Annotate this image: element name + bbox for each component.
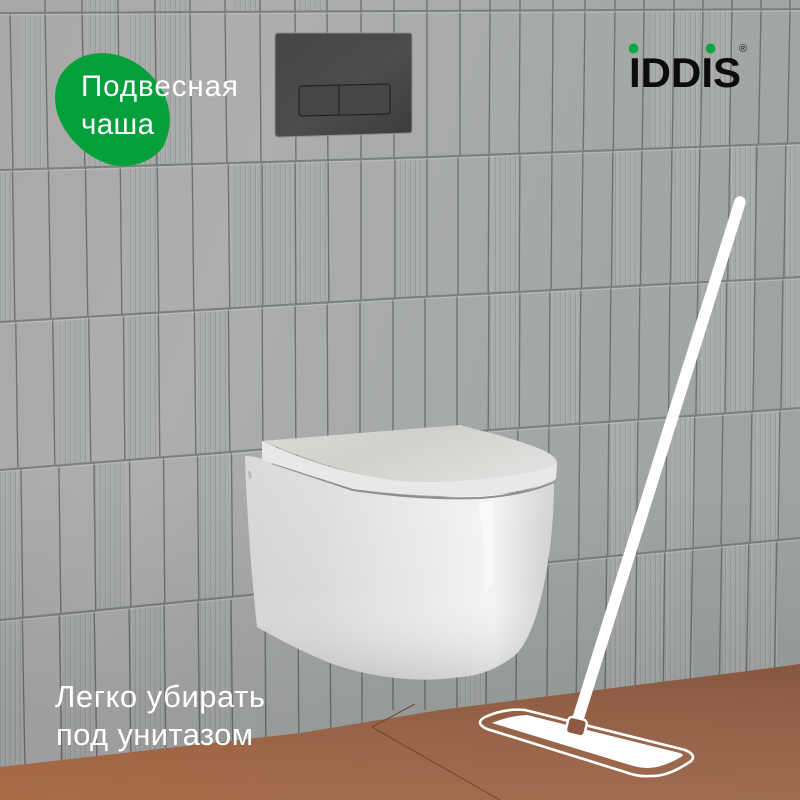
tile row 0 bbox=[44, 0, 791, 12]
logo bbox=[629, 43, 747, 96]
mop joint bbox=[565, 716, 588, 737]
seat gap shadow bbox=[272, 463, 554, 498]
brand mark on bowl: iddis bbox=[247, 470, 253, 479]
floor bbox=[0, 664, 800, 800]
logo wordmark: IDDIS bbox=[629, 49, 741, 96]
tile row 4 bbox=[0, 400, 780, 625]
registered mark: ® bbox=[739, 43, 747, 55]
bowl shading bbox=[245, 456, 554, 680]
mop handle bbox=[577, 202, 740, 722]
mop pad outline bbox=[480, 710, 693, 776]
flush buttons bbox=[299, 84, 390, 116]
toilet bbox=[245, 425, 557, 680]
bowl highlight bbox=[478, 502, 494, 594]
mop pad fill bbox=[492, 715, 683, 768]
badge text: Подвесная bbox=[81, 70, 238, 103]
seat lid side bbox=[262, 441, 557, 496]
toilet bowl bbox=[245, 456, 554, 680]
bottom caption: Легко убирать bbox=[55, 679, 265, 714]
tile row 5 bbox=[0, 530, 777, 770]
tile row 2 bbox=[0, 140, 800, 330]
tile row 1 bbox=[10, 5, 790, 175]
flush plate bbox=[275, 33, 412, 137]
tile horizontal joints bbox=[0, 9, 800, 622]
bottom caption: под унитазом bbox=[56, 717, 253, 752]
mop bbox=[480, 202, 740, 776]
badge text: чаша bbox=[81, 108, 155, 141]
seat lid top bbox=[262, 425, 557, 482]
tile row 3 bbox=[15, 270, 800, 475]
green blob badge bbox=[55, 53, 170, 166]
logo dots bbox=[629, 44, 715, 54]
